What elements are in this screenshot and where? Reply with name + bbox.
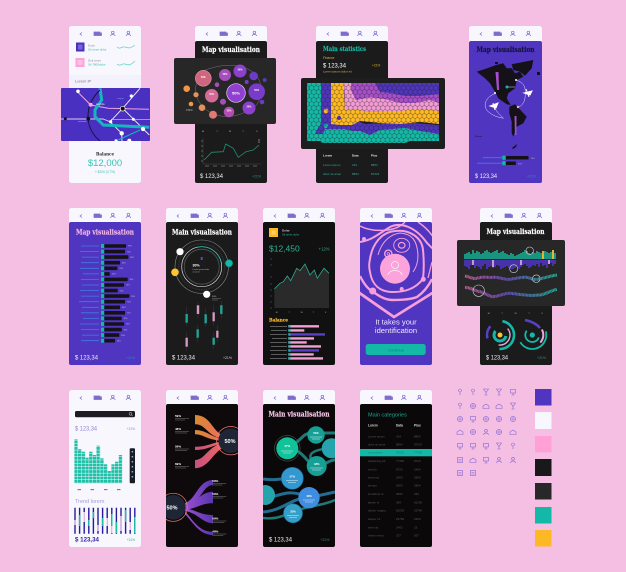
change: +21% [126, 356, 135, 360]
bubble flow diagram: 50% [313, 431, 319, 435]
table header: Lorem [368, 424, 378, 428]
table rows: adipiscing elit [368, 459, 386, 463]
metro map: tempor [117, 97, 124, 100]
horizontal bar chart [79, 246, 135, 342]
table rows: aliqua. Ut [368, 517, 380, 521]
ring diagram: 30% [192, 264, 200, 268]
title: Main visualisation [268, 410, 330, 418]
change: +12% [319, 246, 330, 252]
panel: light bar chart [69, 390, 141, 547]
data table: dolor sit amet [323, 172, 341, 176]
horizontal bar chart: 60% [122, 262, 126, 264]
metro map [61, 88, 150, 143]
heading: Sit amet dolor [282, 232, 299, 236]
button: continue: Continue [388, 347, 405, 352]
table rows: 2904 [396, 484, 403, 488]
data table: Plus [371, 154, 378, 158]
table rows: minim venia [368, 533, 384, 537]
finance summary: +21% [372, 64, 380, 68]
finance summary: $ 123,34 [323, 62, 346, 70]
title: Map visualisation [476, 45, 534, 54]
radial charts [484, 313, 549, 352]
table rows: 284 [414, 492, 419, 496]
list item: dolor [76, 42, 135, 52]
balance block: + $200 (3,7%) [95, 170, 115, 174]
price: $ 123,34 [75, 354, 98, 362]
radial charts: T [528, 313, 530, 315]
line chart: T [242, 131, 244, 133]
balance block [88, 152, 122, 174]
line chart: F [256, 131, 258, 133]
table header: Plus [414, 424, 421, 428]
area chart: W [301, 312, 304, 314]
table rows: 8723 [414, 459, 421, 463]
table header: Data [396, 424, 403, 428]
data table: 8854 [352, 172, 359, 176]
table rows: Lorem ipsum [368, 434, 385, 438]
data table: 87623 [371, 172, 380, 176]
segmented bar chart [74, 439, 122, 490]
message: It takes your [375, 318, 417, 326]
area chart: T [313, 312, 315, 314]
balance bars [270, 326, 325, 358]
area chart: T [288, 312, 290, 314]
message [375, 318, 417, 335]
icon: yellow square [269, 228, 278, 237]
data table: Lorem ipsum [323, 163, 341, 167]
table rows: 2463 [396, 525, 403, 529]
ring diagram: sit amet [192, 270, 200, 274]
ring diagram: Lorem ipsum dolor [192, 269, 209, 271]
table rows: enim ad [368, 525, 379, 529]
bubble chart overlay: 50% [201, 76, 207, 79]
table rows: 2904 [414, 475, 421, 479]
bubble chart overlay: 50% [238, 68, 243, 72]
horizontal bar chart: 80% [130, 279, 134, 281]
bottom stream diagram: 50% [166, 506, 178, 512]
change: +21% [127, 427, 135, 431]
price: $ 123,34 [269, 536, 292, 544]
table rows: 237 [396, 533, 401, 537]
bubble chart overlay: 50% [209, 93, 215, 96]
finance summary [323, 56, 380, 74]
message: identification [375, 326, 417, 335]
table rows: 87623 [396, 451, 404, 455]
data table: 8854 [371, 163, 378, 167]
bubble chart overlay [174, 58, 276, 124]
bubble flow diagram: 27% [289, 474, 296, 478]
bubble chart overlay: tempor [186, 108, 193, 112]
change: +21% [223, 356, 232, 360]
ring diagram [171, 240, 233, 300]
horizontal bar chart: 50% [117, 340, 121, 342]
panel: main categories table [360, 390, 432, 547]
top stream diagram: 50% [224, 439, 236, 445]
table rows: 8723 [396, 467, 403, 471]
table rows: 2894 [414, 484, 421, 488]
metro map: sed do [96, 102, 105, 106]
table rows: 8854 [414, 434, 421, 438]
panel: dolor line chart and balance [263, 208, 335, 365]
value: $12,450 [269, 244, 300, 254]
table rows: 56239 [396, 509, 404, 513]
table rows: 77345 [414, 451, 422, 455]
slider control [130, 448, 135, 483]
table rows: 2464 [396, 475, 403, 479]
price: $ 123,34 [486, 354, 508, 362]
radial charts: F [542, 313, 544, 315]
bottom stream diagram [166, 480, 213, 535]
icon set [457, 389, 516, 476]
table rows: 23 [414, 525, 418, 529]
table rows: 284 [396, 500, 401, 504]
horizontal bar chart: 70% [126, 285, 130, 287]
bottom labels: 69% [212, 516, 219, 520]
horizontal bar chart: 65% [124, 329, 128, 331]
table rows: 8854 [396, 442, 403, 446]
change: +21% [127, 538, 135, 542]
horizontal bar chart: 78% [128, 246, 132, 248]
horizontal bar chart: 75% [127, 312, 131, 314]
title: Main categories [368, 412, 407, 418]
line chart: W [229, 131, 232, 133]
bubble flow diagram: 40% [306, 494, 312, 498]
hexagon heat map [301, 78, 445, 149]
bottom labels: 48% [212, 530, 219, 534]
table rows: dolore magna [368, 509, 386, 513]
radial charts: M [488, 313, 490, 315]
icon: person in circle [380, 254, 410, 284]
map of the Americas: Wizard [475, 135, 483, 138]
horizontal bar chart: 60% [121, 335, 125, 337]
heading: Dolar [282, 228, 291, 232]
table rows: 87623 [414, 442, 422, 446]
area chart: F [325, 312, 327, 314]
table rows: 29784 [414, 509, 422, 513]
panel: purple bar list [69, 208, 141, 365]
bubble chart overlay: 50% [232, 90, 240, 96]
area chart: M [276, 312, 278, 314]
change: +21% [320, 538, 330, 542]
panel: finance card with metro map [61, 26, 150, 183]
finance summary: Lorem ipsum dolor sit [323, 70, 352, 74]
price: $ 123,34 [200, 173, 223, 180]
panel: sankey streams [166, 390, 238, 547]
table rows: dolor sit amet [368, 442, 386, 446]
bubble flow diagram: 35% [290, 510, 296, 514]
horizontal bar chart: 75% [127, 251, 131, 253]
bubble flow diagram: 27% [284, 444, 291, 448]
list item: dolor: Dolor [88, 44, 95, 48]
horizontal bar chart: 20% [112, 274, 116, 276]
bubble chart overlay: 50% [227, 110, 232, 112]
heading [282, 228, 299, 236]
ring diagram: 50% [212, 296, 216, 298]
panel: identification screen [358, 208, 434, 365]
top labels: 69% [175, 462, 181, 466]
bottom labels: 59% [212, 479, 219, 483]
table rows: 2894 [396, 492, 403, 496]
horizontal bar chart: 75% [127, 301, 131, 303]
bubble chart overlay: 50% [223, 73, 228, 76]
panel: bubble map visualisation [174, 26, 276, 183]
table rows: 567 [414, 533, 419, 537]
radial charts: T [501, 313, 503, 315]
table rows: tempor [368, 484, 377, 488]
map of the Americas [475, 60, 540, 149]
price: $ 123,34 [75, 536, 99, 544]
candlestick chart [186, 301, 222, 351]
panel: bubble flow [263, 390, 335, 547]
price: $ 123,34 [172, 354, 195, 362]
table rows: 2464 [414, 467, 421, 471]
table rows: 56239 [414, 500, 422, 504]
list item: dolt: Sit 7800dolor [88, 62, 106, 66]
horizontal bar chart: 85% [131, 296, 135, 298]
table rows: consectetur [368, 451, 383, 455]
list item: dolt [76, 58, 135, 67]
panel: main statistics hex map [301, 26, 445, 183]
horizontal bar chart: 70% [126, 324, 130, 326]
top labels [175, 414, 189, 468]
horizontal bar chart: 60% [122, 307, 126, 309]
horizontal bar chart: 82% [130, 257, 134, 259]
title: Map visualisation [76, 228, 134, 236]
line chart: T [216, 131, 218, 133]
area chart [270, 259, 329, 314]
table rows: incididunt ut [368, 492, 384, 496]
table rows [368, 434, 422, 537]
search bar [75, 411, 135, 417]
bottom labels [212, 479, 226, 536]
change: +21% [537, 356, 546, 360]
bottom labels: 59% [212, 492, 219, 496]
radial charts: W [515, 313, 518, 315]
top labels: 59% [175, 444, 181, 448]
line chart [201, 131, 261, 166]
metro map: eiusmod [78, 121, 87, 123]
horizontal bar chart: 55% [120, 290, 124, 292]
table rows: 234 [396, 434, 401, 438]
price: $ 123,34 [75, 426, 97, 432]
bubble flow diagram: 48% [314, 462, 320, 466]
balance block: $12,000 [88, 158, 122, 169]
bar rows: 45% [518, 164, 522, 166]
label: Lorem IP: Lorem IP [75, 78, 92, 84]
top stream diagram [195, 415, 238, 468]
wave chart overlay [457, 240, 565, 306]
panel: main visualisation rings [166, 208, 238, 365]
colour swatches [535, 389, 552, 546]
bubble chart overlay: 50% [247, 106, 252, 108]
table rows: 2463 [414, 517, 421, 521]
title: Map visualisation [202, 45, 260, 54]
trend heading: Trend lorem [75, 499, 105, 505]
table header [368, 424, 421, 428]
horizontal bar chart: 55% [119, 268, 123, 270]
panel: barcode and wave visualisation [457, 208, 565, 365]
change: +21% [252, 174, 261, 178]
data table: 234 [352, 163, 357, 167]
data table: Lorem [323, 154, 333, 158]
horizontal bar chart: 65% [124, 318, 128, 320]
title: Main statistics [323, 45, 366, 53]
balance block: Balance [96, 152, 114, 156]
list item: dolt: Dolt amet [88, 58, 101, 62]
price: $ 123,34 [475, 173, 497, 180]
stacked trend bars [75, 508, 135, 534]
contour illustration [358, 222, 434, 317]
table rows: 77345 [396, 459, 404, 463]
data table [323, 154, 380, 176]
title: Main visualisation [172, 228, 232, 236]
table rows: sed do [368, 467, 377, 471]
change: +21% [527, 174, 536, 178]
table rows: 29784 [396, 517, 404, 521]
highlighted row [360, 449, 432, 456]
title: Map visualisation [486, 227, 544, 236]
table rows: labore et [368, 500, 379, 504]
bar rows [477, 156, 535, 166]
panel: purple world map [469, 26, 542, 183]
balance heading: Balance [269, 318, 288, 324]
table rows: eiusmod [368, 475, 379, 479]
bubble flow diagram [263, 426, 335, 524]
top labels: 59% [175, 414, 181, 418]
button: continue [366, 344, 426, 355]
list item: dolor: Sit amet dolor [88, 48, 107, 52]
top labels: 48% [175, 427, 181, 431]
bar rows: 78% [530, 158, 535, 160]
bubble chart overlay: 50% [254, 89, 260, 92]
finance summary: Finance [323, 56, 335, 60]
line chart: M [202, 131, 204, 133]
data table: Data [352, 154, 359, 158]
